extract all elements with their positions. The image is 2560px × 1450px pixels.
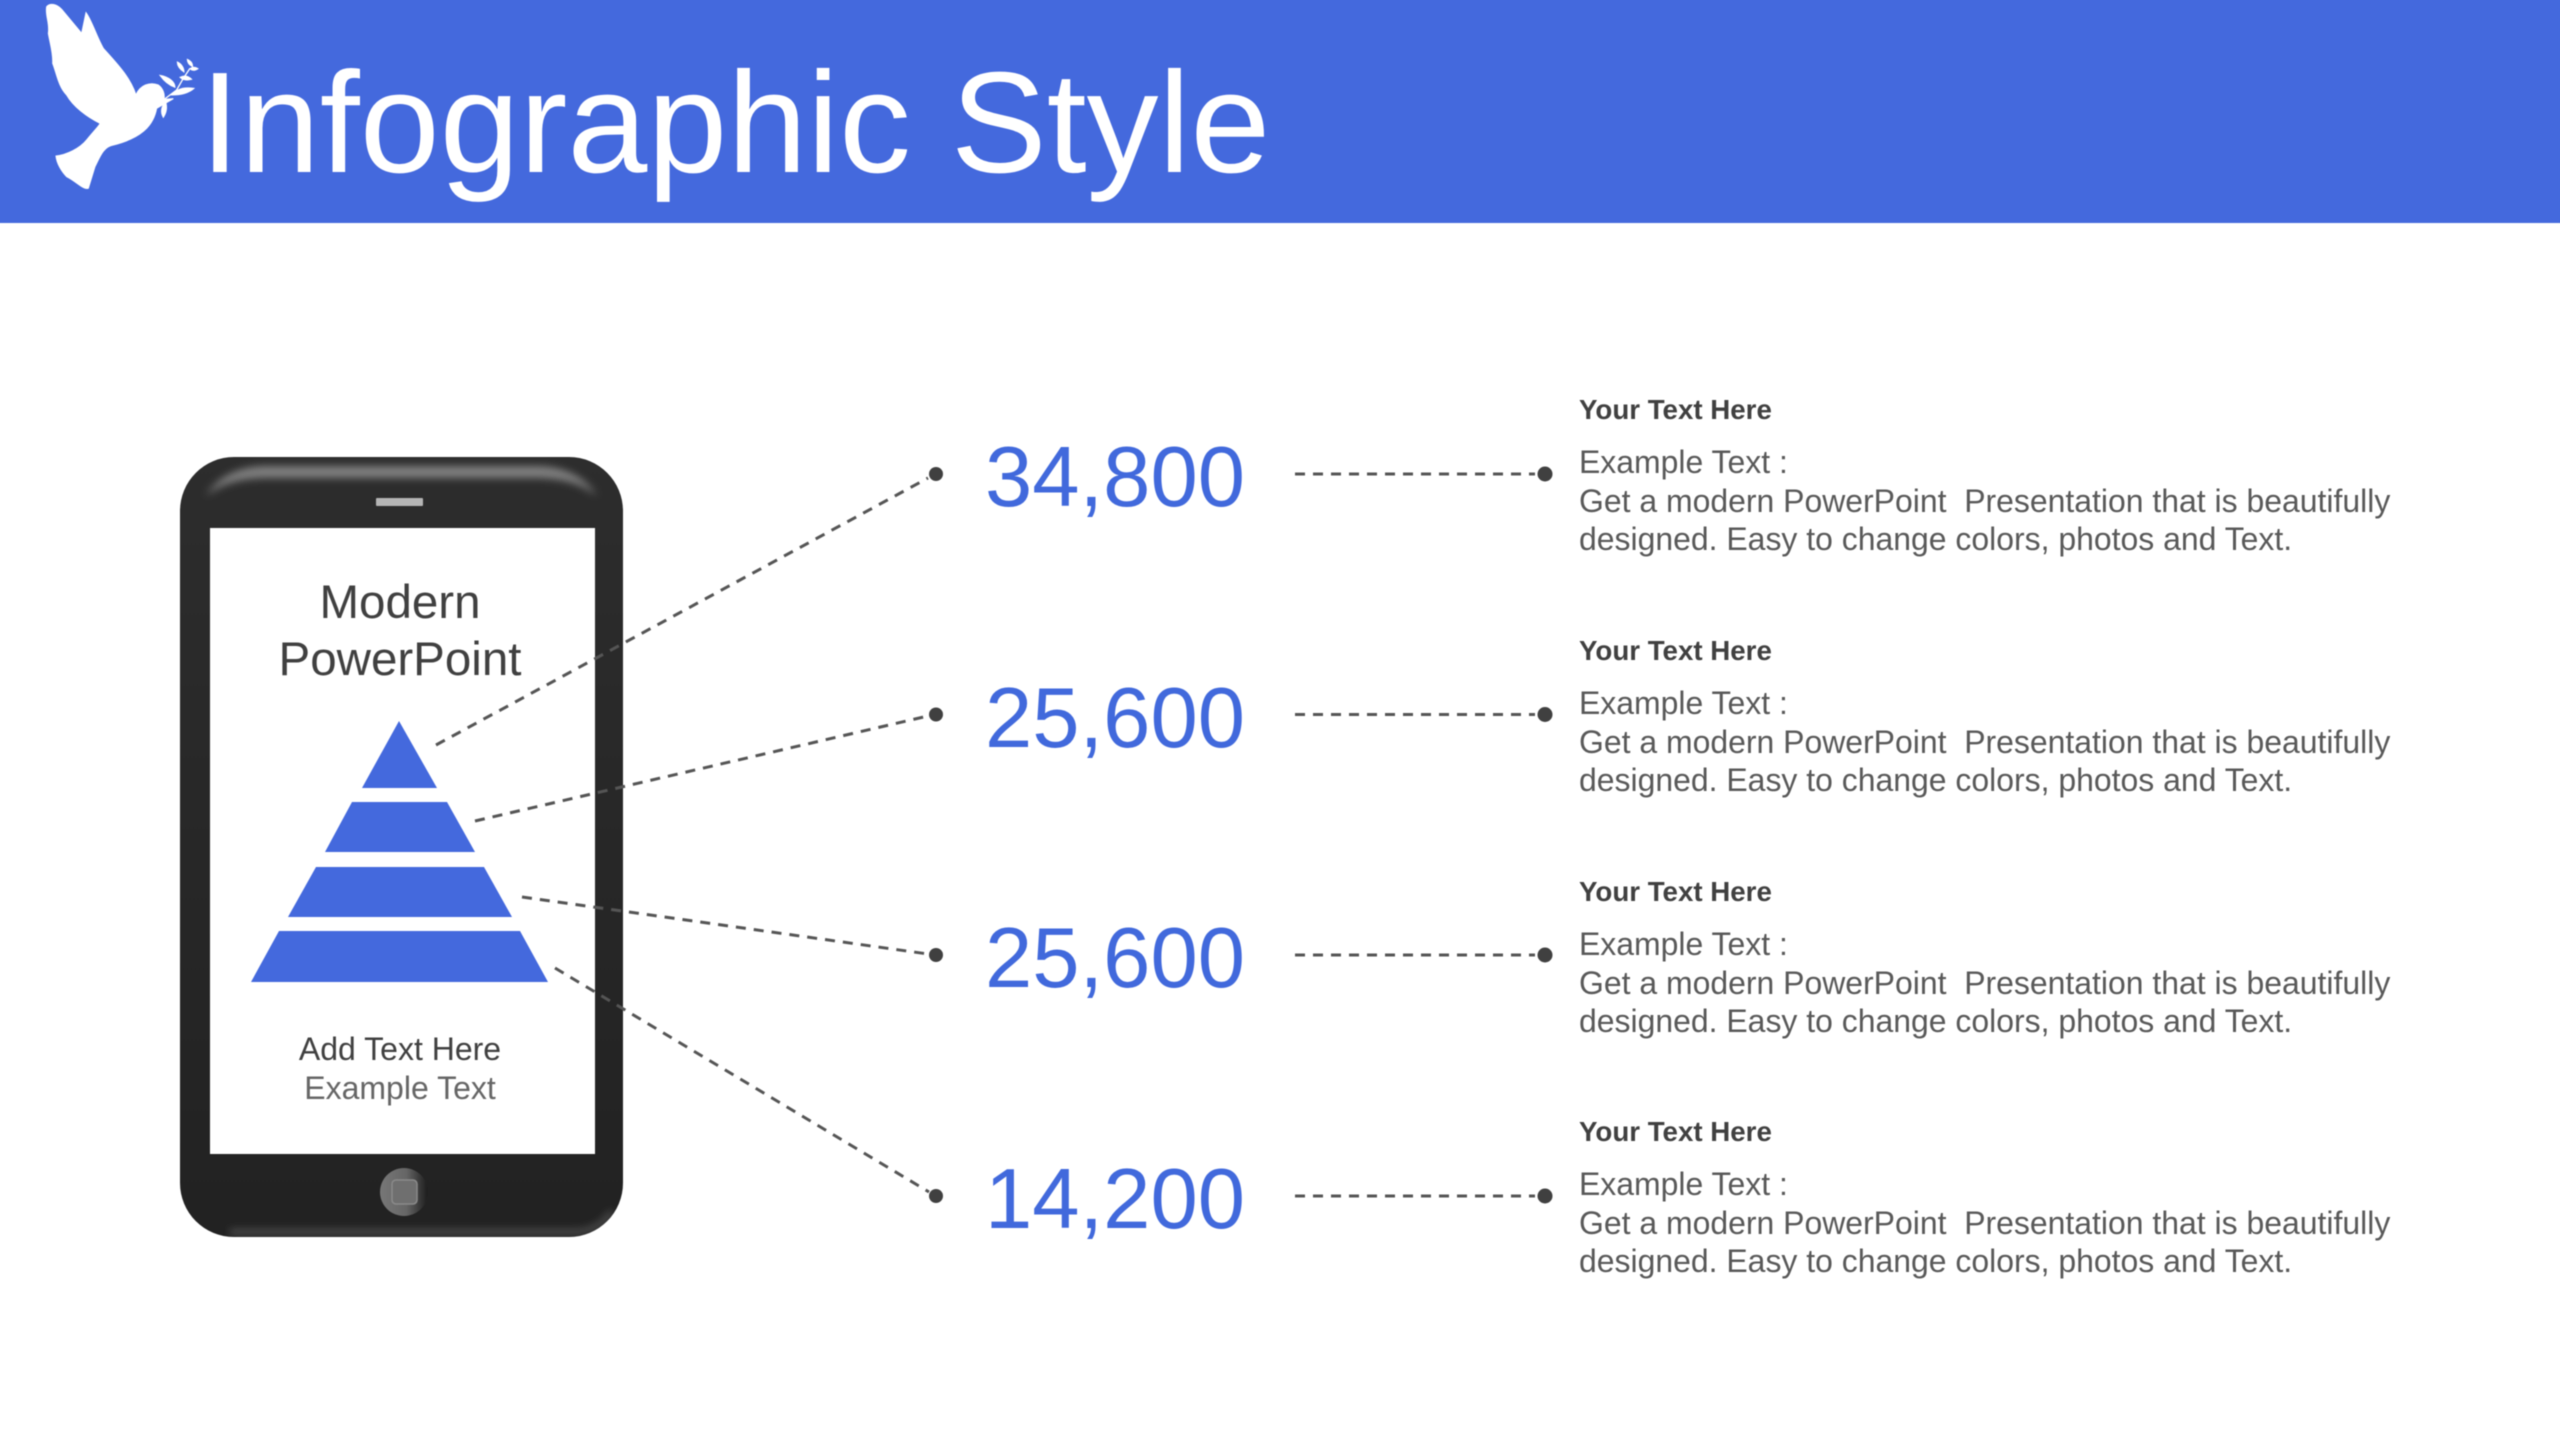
description: Example Text : [1579, 444, 1788, 480]
description [1579, 635, 2390, 798]
screen caption: Example Text [304, 1070, 496, 1106]
title: Infographic Style [200, 43, 1270, 203]
description: Example Text : [1579, 926, 1788, 962]
description: designed. Easy to change colors, photos and Text. [1579, 1243, 2292, 1279]
icon: white dove with olive branch [46, 4, 198, 189]
value: 14,200 [985, 1152, 1245, 1247]
screen caption [299, 1031, 501, 1106]
description [1579, 394, 2390, 557]
end dot [1538, 466, 1552, 482]
description: Example Text : [1579, 685, 1788, 721]
screen heading: PowerPoint [279, 633, 521, 686]
description [1579, 1116, 2390, 1279]
description: Get a modern PowerPoint Presentation that is beautifully [1579, 483, 2390, 519]
row 2 [929, 635, 2390, 798]
value: 25,600 [985, 671, 1245, 766]
description: designed. Easy to change colors, photos and Text. [1579, 1003, 2292, 1039]
description: Your Text Here [1579, 1116, 1772, 1147]
description: designed. Easy to change colors, photos and Text. [1579, 521, 2292, 557]
description: Get a modern PowerPoint Presentation that is beautifully [1579, 1205, 2390, 1241]
phone speaker [376, 498, 423, 506]
end dot [1538, 948, 1552, 962]
description [1579, 876, 2390, 1039]
dashed leader [1295, 713, 1535, 716]
end dot [1538, 1188, 1552, 1204]
header banner [0, 0, 2560, 223]
phone device [180, 457, 623, 1237]
description: designed. Easy to change colors, photos and Text. [1579, 762, 2292, 798]
description: Example Text : [1579, 1166, 1788, 1202]
description: Your Text Here [1579, 394, 1772, 425]
phone screen [210, 528, 595, 1154]
screen caption: Add Text Here [299, 1031, 501, 1067]
description: Your Text Here [1579, 635, 1772, 666]
start dot [929, 467, 943, 481]
row 3 [929, 876, 2390, 1039]
description: Your Text Here [1579, 876, 1772, 907]
value: 25,600 [985, 911, 1245, 1006]
connector lines from pyramid to dots [436, 478, 929, 1192]
row 4 [929, 1116, 2390, 1279]
start dot [929, 708, 943, 722]
start dot [929, 948, 943, 962]
phone home button [380, 1168, 428, 1216]
dashed leader [1295, 472, 1535, 476]
pyramid chart [251, 721, 548, 982]
description: Get a modern PowerPoint Presentation that is beautifully [1579, 724, 2390, 760]
dashed leader [1295, 954, 1535, 956]
value: 34,800 [985, 430, 1245, 525]
row 1 [929, 394, 2390, 557]
screen heading: Modern [319, 576, 481, 629]
end dot [1538, 707, 1552, 722]
start dot [929, 1189, 943, 1203]
phone bottom bevel [230, 1212, 612, 1232]
description: Get a modern PowerPoint Presentation that is beautifully [1579, 965, 2390, 1001]
dashed leader [1295, 1194, 1535, 1198]
phone top bevel highlight [206, 466, 597, 496]
